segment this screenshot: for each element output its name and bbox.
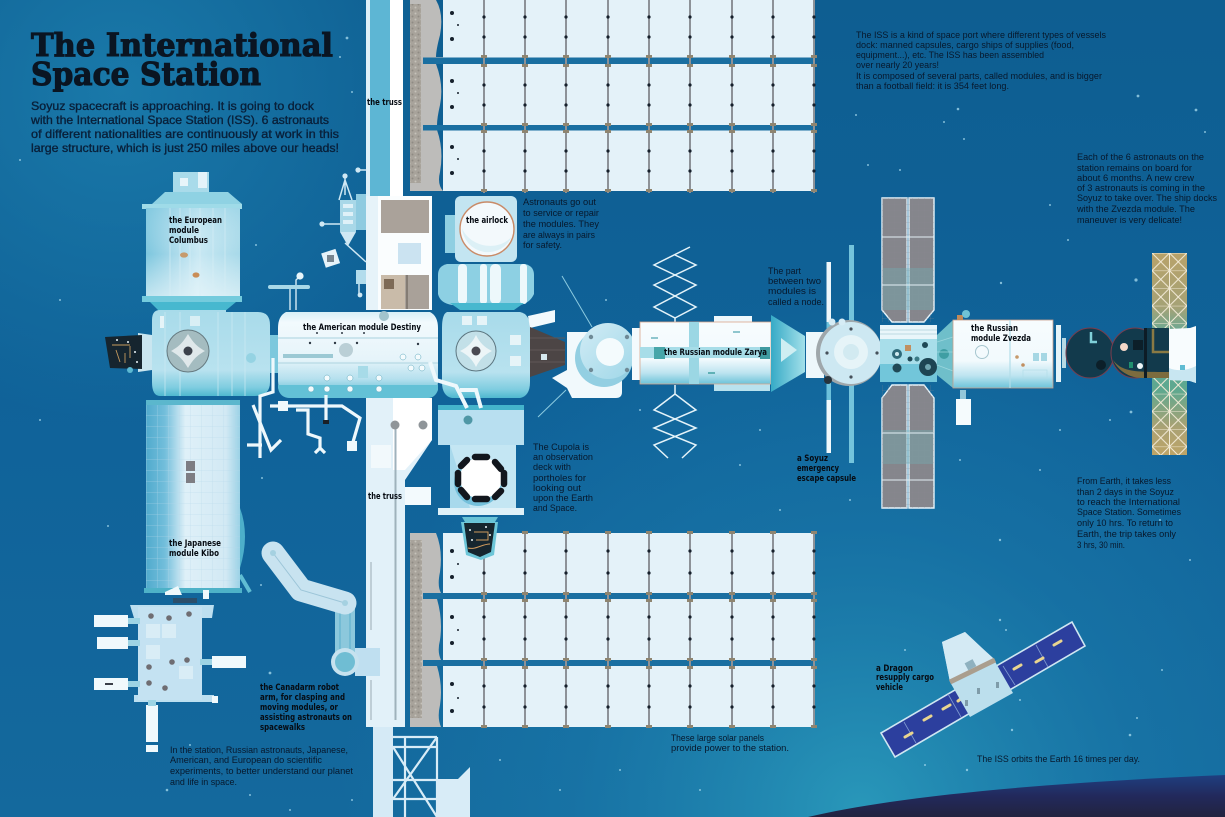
label: Canadarm: spacewalks xyxy=(260,723,305,733)
solar panels top xyxy=(410,0,817,193)
module: European Columbus xyxy=(142,172,242,312)
module: Harmony node with disc xyxy=(138,310,280,396)
text: node: between two xyxy=(768,276,821,287)
Soyuz spacecraft xyxy=(1066,253,1196,455)
annotation lines xyxy=(538,276,592,417)
label: Japanese module: module Kibo xyxy=(169,549,219,559)
module: teal cone and node xyxy=(771,245,882,463)
text: about the ISS: over nearly 20 years! xyxy=(856,60,939,71)
label: Zvezda: module Zvezda xyxy=(971,334,1031,344)
text: solar panels: provide power to the station. xyxy=(671,743,789,754)
truss upper and lower xyxy=(366,0,470,817)
text: spacewalks: are always in pairs xyxy=(523,230,595,241)
module: dark docking cone and node 3 xyxy=(530,323,642,398)
Dragon resupply vehicle xyxy=(881,622,1085,757)
text: cupola: and Space. xyxy=(533,503,577,514)
text: spacewalks: to service or repair xyxy=(523,208,600,219)
title xyxy=(31,26,333,93)
label: soyuz escape capsule xyxy=(797,454,856,484)
label: Dragon: vehicle xyxy=(876,683,903,693)
text: spacewalks: for safety. xyxy=(523,240,562,251)
module: Japanese Kibo xyxy=(144,400,250,603)
label: Canadarm: moving modules, or xyxy=(260,703,339,713)
text: solar panels: These large solar panels xyxy=(671,733,764,744)
label: soyuz escape capsule: emergency xyxy=(797,464,839,474)
label: European module xyxy=(169,216,222,246)
earth horizon xyxy=(808,775,1225,817)
label: Zarya: the Russian module Zarya xyxy=(664,348,767,358)
label: Dragon: resupply cargo xyxy=(876,673,934,683)
antenna over destiny xyxy=(268,272,310,310)
text: cupola: portholes for xyxy=(533,473,587,484)
label: truss lower: the truss xyxy=(368,492,402,502)
module: Zvezda service section xyxy=(880,320,953,388)
text: experiments: American, and European do scientific xyxy=(170,755,322,766)
module: Russian Zarya xyxy=(640,316,771,391)
text: travel time: to reach the International xyxy=(1077,497,1180,508)
text: cupola xyxy=(533,442,593,514)
label: Canadarm: assisting astronauts on xyxy=(260,713,352,723)
intro text: Soyuz spacecraft is approaching. It is going to dock xyxy=(31,99,315,113)
text: solar panels xyxy=(671,733,789,754)
text: orbits: The ISS orbits the Earth 16 times per day. xyxy=(977,754,1140,765)
text: cupola: upon the Earth xyxy=(533,493,593,504)
antennas on Zarya xyxy=(654,247,696,458)
label: Zvezda xyxy=(971,324,1031,344)
label: soyuz escape capsule: a Soyuz xyxy=(797,454,828,464)
text: experiments: experiments, to better understand our planet xyxy=(170,766,353,777)
antenna arms on truss xyxy=(319,167,366,297)
title: The International xyxy=(31,26,333,64)
intro text: with the International Space Station (ISS). 6 astronauts xyxy=(30,113,329,127)
module: Russian Zvezda xyxy=(953,310,1066,425)
text: cupola: The Cupola is xyxy=(533,442,589,453)
text: travel time: Earth, the trip takes only xyxy=(1077,529,1176,540)
solar panels bottom xyxy=(410,531,817,728)
module: dark end cap left xyxy=(105,335,142,373)
text: node: called a node. xyxy=(768,297,824,308)
array panel texture xyxy=(882,198,934,508)
label: European module: the European xyxy=(169,216,222,226)
text: about the ISS: dock: manned capsules, cargo ships of supplies (food, xyxy=(856,40,1074,51)
text: about the ISS: equipment...), etc. The ISS has been assembled xyxy=(856,50,1044,61)
text: crew: about 6 months. A new crew xyxy=(1077,173,1194,184)
label: airlock: the airlock xyxy=(466,216,508,226)
label: European module: module xyxy=(169,226,199,236)
text: spacewalks: Astronauts go out xyxy=(523,197,596,208)
white bracket above node 3 xyxy=(528,310,555,328)
module: Tranquility with Cupola xyxy=(438,405,524,560)
text: about the ISS: The ISS is a kind of space port where different types of vessels xyxy=(856,30,1106,41)
label: Canadarm: the Canadarm robot xyxy=(260,683,339,693)
text: spacewalks xyxy=(523,197,600,251)
text: experiments: In the station, Russian astronauts, Japanese, xyxy=(170,745,348,756)
label: Zvezda: the Russian xyxy=(971,324,1018,334)
Zvezda solar arrays xyxy=(882,198,934,508)
text: node: The part xyxy=(768,266,801,277)
module: American Destiny xyxy=(278,311,438,398)
module: Unity node xyxy=(442,312,530,398)
text: crew: with the Zvezda module. The xyxy=(1076,204,1195,215)
text: about the ISS xyxy=(856,30,1106,92)
text: cupola: an observation xyxy=(533,452,593,463)
label: Dragon: a Dragon xyxy=(876,664,913,674)
text: travel time: only 10 hrs. To return to xyxy=(1077,518,1173,529)
text: node xyxy=(768,266,824,308)
text: about the ISS: It is composed of several parts, called modules, and is bigger xyxy=(856,71,1103,82)
text: crew: maneuver is very delicate! xyxy=(1077,215,1182,226)
text: about the ISS: than a football field: it is 354 feet long. xyxy=(856,81,1009,92)
text: travel time: than 2 days in the Soyuz xyxy=(1077,487,1174,498)
text: travel time xyxy=(1077,476,1181,551)
label: Canadarm xyxy=(260,683,352,733)
label: soyuz escape capsule: escape capsule xyxy=(797,474,856,484)
label: truss upper: the truss xyxy=(367,98,402,108)
label: Canadarm: arm, for clasping and xyxy=(260,693,345,703)
label: Japanese module: the Japanese xyxy=(169,539,221,549)
text: node: modules is xyxy=(768,286,816,297)
label: Japanese module xyxy=(169,539,221,559)
robotic piping under destiny xyxy=(247,358,360,458)
label: European module: Columbus xyxy=(169,236,208,246)
intro text: of different nationalities are continuously at work in this xyxy=(31,127,339,141)
text: crew: station remains on board for xyxy=(1077,163,1193,174)
text: travel time: Space Station. Sometimes xyxy=(1077,507,1181,518)
label: Dragon xyxy=(876,664,934,693)
text: experiments: and life in space. xyxy=(170,777,237,788)
intro text xyxy=(30,99,339,155)
text: travel time: From Earth, it takes less xyxy=(1077,476,1171,487)
intro text: large structure, which is just 250 miles above our heads! xyxy=(31,141,339,155)
text: crew: of 3 astronauts is coming in the xyxy=(1077,183,1205,194)
title: Space Station xyxy=(31,55,261,93)
text: spacewalks: the modules. They xyxy=(523,219,599,230)
text: crew: Soyuz to take over. The ship docks xyxy=(1077,193,1217,204)
text: crew: Each of the 6 astronauts on the xyxy=(1077,152,1204,163)
text: travel time: 3 hrs, 30 min. xyxy=(1077,540,1125,551)
text: crew xyxy=(1076,152,1217,226)
connecting pipes xyxy=(430,362,481,408)
text: experiments xyxy=(170,745,353,788)
text: cupola: looking out xyxy=(533,483,581,494)
experiment platform xyxy=(94,605,246,752)
module: airlock xyxy=(438,196,534,310)
label: American module: the American module Destiny xyxy=(303,323,421,333)
text: cupola: deck with xyxy=(533,462,571,473)
canadarm robot arm xyxy=(270,550,380,676)
